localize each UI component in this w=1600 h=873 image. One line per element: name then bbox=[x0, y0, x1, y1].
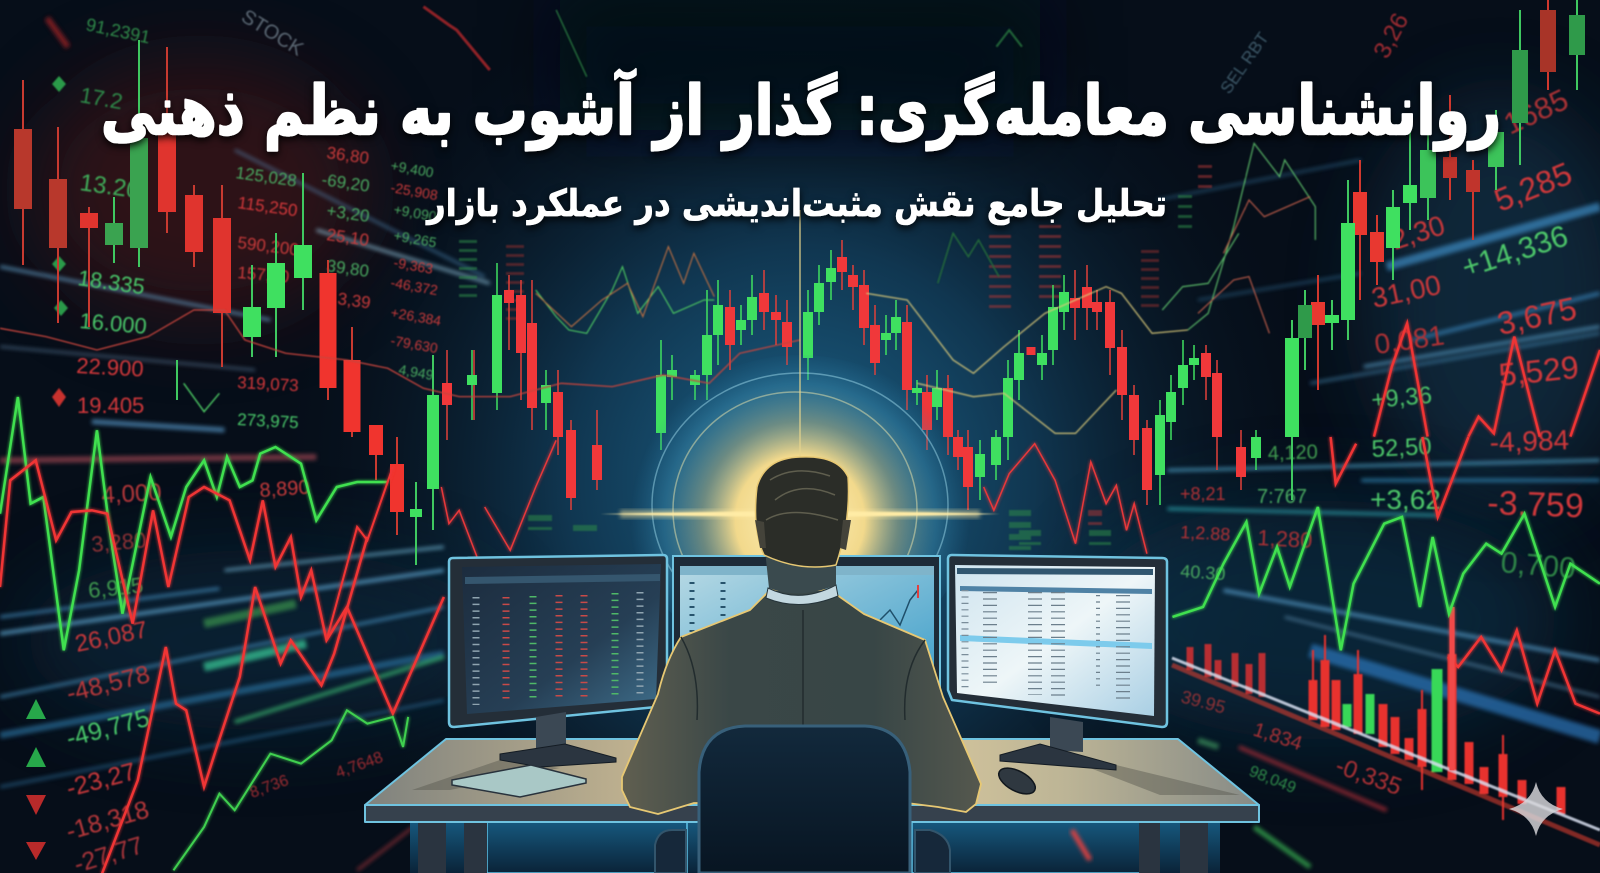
market numbers: left wall: 590,200 bbox=[237, 233, 300, 259]
market numbers: left wall: -48,578 bbox=[64, 660, 153, 708]
monitor base: right bbox=[1000, 744, 1116, 770]
monitor stand: right bbox=[1050, 717, 1083, 752]
trend line: right green bbox=[1172, 507, 1600, 650]
market numbers: left wall: 125,028 bbox=[234, 163, 298, 191]
market numbers: right wall: 0,081 bbox=[1373, 319, 1446, 360]
market numbers: right wall bbox=[1179, 9, 1584, 801]
market numbers: left wall: -23,27 bbox=[63, 757, 139, 803]
subtitle: تحلیل جامع نقش مثبت‌اندیشی در عملکرد بازار bbox=[425, 182, 1167, 225]
office chair bbox=[655, 726, 950, 873]
market numbers: left wall: 25,10 bbox=[325, 225, 370, 250]
market numbers: left wall: 4,949 bbox=[397, 361, 435, 383]
mouse bbox=[995, 763, 1039, 799]
trend line: lower-left green bbox=[173, 710, 408, 870]
market markers: left triangles bbox=[26, 18, 68, 860]
trend lines: right red bbox=[984, 323, 1600, 770]
market numbers: right wall: 40.30 bbox=[1180, 561, 1226, 584]
monitor: left with market table bbox=[449, 555, 667, 752]
market numbers: right wall: +8,21 bbox=[1180, 484, 1226, 504]
icon: sparkle watermark bbox=[1509, 782, 1563, 836]
market numbers: left wall: 19.405 bbox=[77, 393, 144, 418]
under desk panel bbox=[410, 820, 1220, 873]
market numbers: right wall: 98,049 bbox=[1247, 763, 1298, 797]
market numbers: left wall: -79,630 bbox=[389, 332, 439, 356]
halo of light behind trader bbox=[600, 210, 1000, 665]
market numbers: left wall: 18.335 bbox=[76, 265, 146, 299]
market numbers: right wall: +14,336 bbox=[1458, 220, 1572, 285]
market numbers: right wall: 5,285 bbox=[1489, 155, 1577, 218]
market numbers: left wall: 6,915 bbox=[87, 572, 144, 603]
market numbers: right wall: 31,00 bbox=[1369, 269, 1444, 314]
market numbers: right wall: 7:767 bbox=[1257, 486, 1307, 508]
monitor stand: left bbox=[536, 712, 566, 752]
market numbers: right wall: 1,280 bbox=[1257, 525, 1313, 553]
market numbers: right wall: +9,36 bbox=[1370, 382, 1433, 414]
candlesticks: right large bbox=[1292, 0, 1577, 500]
market numbers: left wall: -25,908 bbox=[389, 179, 439, 203]
market numbers: left wall: +3,20 bbox=[325, 201, 371, 226]
market numbers: left wall: 115,250 bbox=[236, 193, 299, 220]
candlesticks: middle band bbox=[447, 240, 1256, 510]
trader: shirt collar bbox=[766, 585, 838, 605]
market numbers: left wall: 22.900 bbox=[76, 353, 144, 382]
trader: ears bbox=[755, 520, 851, 550]
market numbers: left wall: -69,20 bbox=[320, 170, 371, 196]
market numbers: left wall: +9,090 bbox=[392, 201, 438, 224]
bar chart: lower right bbox=[1172, 635, 1600, 845]
market numbers: left wall: 319,073 bbox=[237, 373, 299, 395]
market numbers: right wall: -4,984 bbox=[1489, 424, 1570, 458]
market numbers: left wall: +9,265 bbox=[392, 227, 438, 250]
trader seen from behind bbox=[622, 457, 981, 814]
market numbers: left wall: -9,363 bbox=[392, 254, 435, 277]
lower-left trend line numbers: 8,736 bbox=[248, 772, 291, 802]
market numbers: right wall: 0,700 bbox=[1499, 546, 1577, 586]
trend lines: left red bbox=[0, 440, 556, 873]
market numbers: left wall: 4,000 bbox=[101, 479, 162, 509]
market numbers: left wall: 39,80 bbox=[325, 256, 370, 281]
market numbers: right wall: 1,834 bbox=[1250, 719, 1305, 755]
lower-left trend line numbers: 4,7648 bbox=[334, 749, 385, 782]
lower-left trend line numbers bbox=[248, 749, 385, 802]
trader: neck bbox=[765, 550, 836, 593]
market numbers: left wall: 273,975 bbox=[237, 410, 299, 432]
market numbers: left wall: -18,318 bbox=[63, 795, 152, 846]
market numbers: left wall: 157,70 bbox=[237, 263, 290, 287]
market numbers: right wall: 2,30 bbox=[1387, 209, 1449, 256]
monitor: centre bbox=[673, 556, 940, 700]
monitor: right with table bbox=[948, 555, 1167, 752]
market numbers: right wall: SEL RBT bbox=[1217, 29, 1273, 97]
market numbers: right wall: 4,120 bbox=[1267, 441, 1318, 465]
market numbers: left wall: 16.000 bbox=[79, 308, 148, 339]
market numbers: left wall: +26,384 bbox=[389, 304, 443, 329]
market numbers: left wall: 3,280 bbox=[90, 527, 147, 557]
market numbers: left wall: -46,372 bbox=[389, 274, 439, 298]
desk bbox=[365, 739, 1259, 873]
market numbers: right wall: 3,26 bbox=[1368, 9, 1414, 63]
market numbers: left wall: 13.20 bbox=[78, 169, 141, 204]
market numbers: right wall: 5,529 bbox=[1497, 349, 1580, 393]
market numbers: left wall: 17.2 bbox=[78, 82, 125, 114]
trend line: left green bbox=[0, 397, 388, 650]
trend lines: thin upper indicators bbox=[0, 7, 1315, 433]
market numbers: right wall: -3,759 bbox=[1487, 484, 1584, 525]
market numbers: right wall: 52,50 bbox=[1371, 433, 1432, 463]
market numbers: right wall: 39.95 bbox=[1179, 687, 1228, 718]
market numbers: right wall: -0,335 bbox=[1332, 752, 1405, 801]
market numbers: right wall: +3,62 bbox=[1370, 484, 1441, 515]
candlesticks: left large bbox=[23, 40, 433, 565]
trader: jacket bbox=[622, 590, 981, 814]
market numbers: left wall: +9,400 bbox=[389, 157, 435, 180]
tablet on desk bbox=[452, 765, 586, 797]
monitor base: left bbox=[500, 744, 616, 767]
dim data panels behind the chart bbox=[468, 165, 1205, 550]
market numbers: left wall: 26,087 bbox=[73, 616, 150, 658]
market numbers: left wall: 91,2391 bbox=[84, 14, 152, 47]
market numbers: right wall: 3,675 bbox=[1494, 290, 1580, 342]
market numbers: right wall: 1,2.88 bbox=[1180, 522, 1231, 545]
market numbers: left wall: 36,80 bbox=[325, 143, 370, 168]
market numbers: left wall: 3,39 bbox=[336, 289, 372, 313]
market numbers: left wall bbox=[63, 6, 443, 873]
market numbers: left wall: 8,890 bbox=[259, 477, 310, 502]
market numbers: right wall: 1685 bbox=[1499, 83, 1573, 141]
market numbers: left wall: -49,775 bbox=[63, 704, 152, 753]
trader: head and hair bbox=[756, 457, 848, 567]
market numbers: left wall: STOCK bbox=[237, 6, 308, 61]
